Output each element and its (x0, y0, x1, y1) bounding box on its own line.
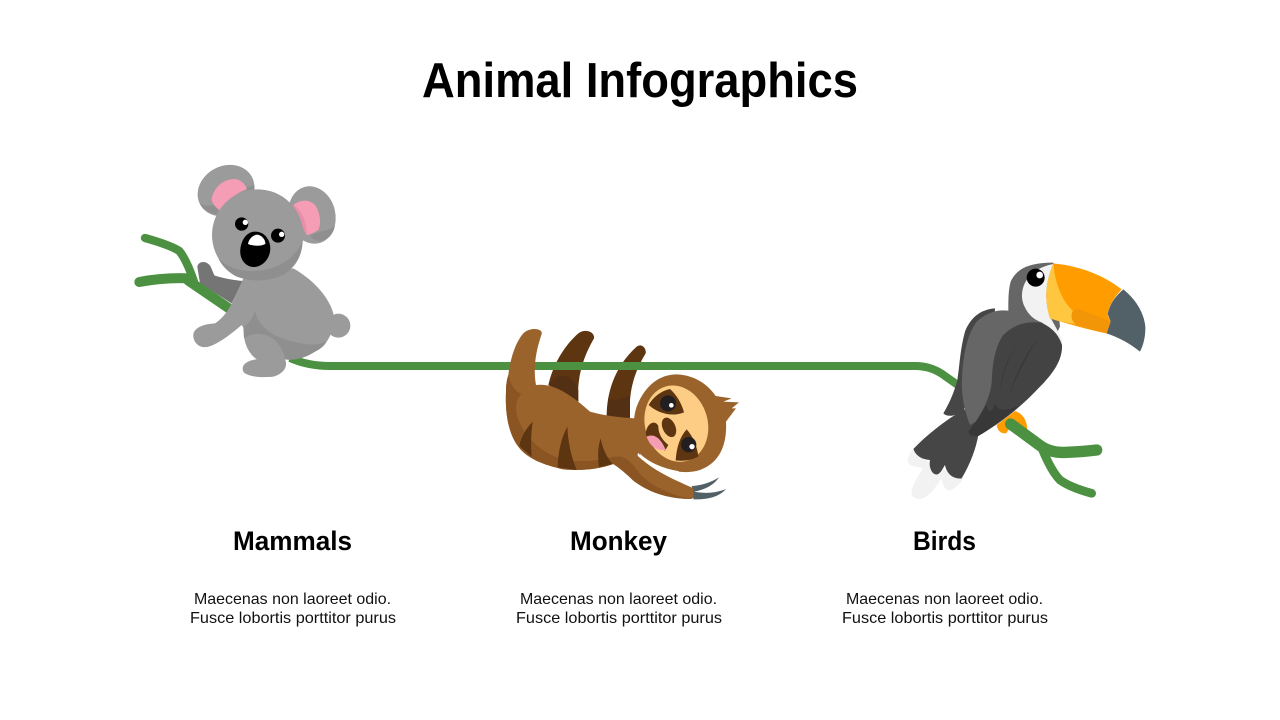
text block: birds: Fusce lobortis porttitor purus (842, 610, 1048, 627)
koala tail (326, 314, 350, 338)
koala body shading (243, 310, 327, 360)
text block: mammals (190, 591, 396, 627)
title: Animal Infographics (422, 54, 858, 108)
toucan wing (968, 322, 1062, 436)
sloth claws (692, 477, 726, 499)
icon: koala (139, 155, 350, 377)
text block: mammals: Maecenas non laoreet odio. (194, 591, 391, 608)
koala branch (139, 238, 253, 325)
koala nose (240, 232, 270, 267)
sloth mouth (646, 423, 668, 451)
sloth stripes (519, 422, 613, 470)
text block: monkey: Maecenas non laoreet odio. (520, 591, 717, 608)
main branch line (290, 358, 962, 388)
koala body (193, 268, 334, 377)
koala head (212, 189, 303, 281)
koala eyes (235, 217, 248, 231)
sloth body (506, 329, 695, 499)
column: mammals (190, 526, 396, 627)
toucan back wing (943, 308, 995, 416)
sloth face (636, 378, 717, 469)
text block: monkey: Fusce lobortis porttitor purus (516, 610, 722, 627)
toucan white tail feathers (908, 450, 963, 499)
toucan white cheek (1022, 264, 1063, 347)
koala left ear (189, 155, 263, 226)
sloth body shading (506, 375, 692, 499)
column: monkey (516, 526, 722, 627)
sloth eyes (660, 395, 676, 411)
toucan beak (1046, 263, 1122, 333)
toucan body and head (962, 263, 1060, 425)
text block: mammals: Fusce lobortis porttitor purus (190, 610, 396, 627)
icon: toucan (908, 263, 1145, 499)
heading: mammals: Mammals (233, 526, 352, 556)
koala back arm (197, 262, 243, 303)
heading: birds: Birds (913, 526, 976, 556)
toucan tail (913, 409, 978, 478)
sloth head (634, 374, 739, 472)
sloth eye patches (649, 389, 698, 461)
text block: monkey (516, 591, 722, 627)
icon: sloth (506, 329, 739, 499)
text block: birds (842, 591, 1048, 627)
toucan foot (997, 411, 1027, 433)
sloth nose (659, 415, 679, 439)
toucan perch branch (1011, 424, 1097, 493)
text block: birds: Maecenas non laoreet odio. (846, 591, 1043, 608)
sloth arm gap (639, 455, 678, 473)
column: birds (842, 526, 1048, 627)
heading: monkey: Monkey (570, 526, 667, 556)
koala right ear (282, 181, 342, 249)
icon: sloth back limbs (490, 331, 750, 418)
toucan eye (1027, 269, 1045, 287)
